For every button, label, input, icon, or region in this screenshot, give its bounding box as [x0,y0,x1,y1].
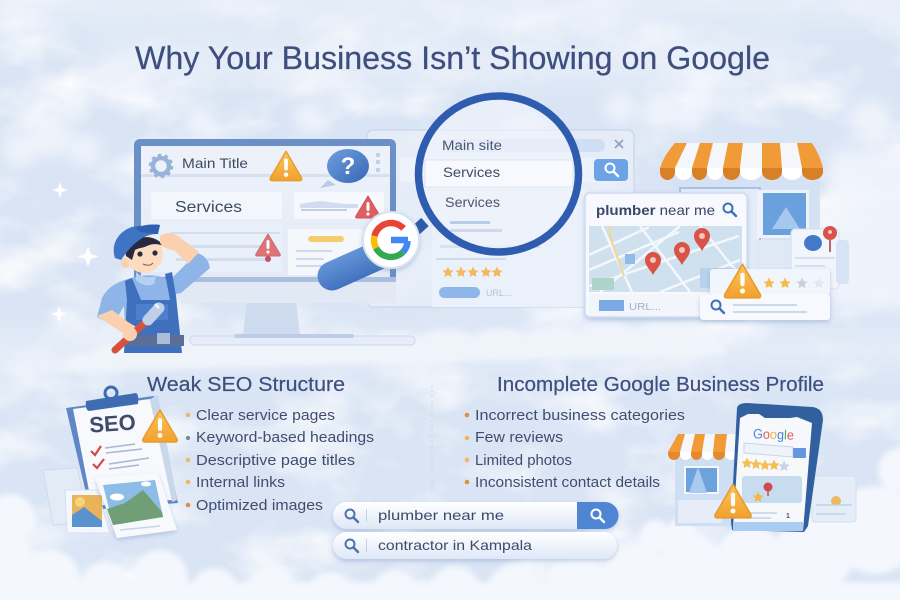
photo yellow mountain [65,490,110,533]
main title text: Main Title [182,155,248,171]
wrench [115,304,159,350]
handle [332,222,425,276]
lens rows: Main site [442,138,502,153]
card behind phone [812,476,856,522]
lens rows [425,138,573,232]
gear icon [150,155,172,177]
toolbar dots [376,153,380,172]
lens rows: Services [443,164,500,180]
shirt and arms [97,253,210,352]
map [589,226,742,292]
storefront [660,143,849,305]
search button [594,159,628,181]
clipboard [66,387,178,510]
bullet list [465,408,685,491]
services row [151,192,282,219]
lens rows: Services [445,195,500,210]
search bar: plumber near me: plumber near me [378,507,504,523]
text lines with warning [150,222,282,272]
url row: URL... [629,302,661,313]
phone and small storefront illustration [668,403,856,532]
warning icon [715,484,751,518]
google wordmark: Google [753,426,794,443]
plumber character [97,224,210,353]
search field [744,443,806,458]
map search card [585,193,747,317]
stars [764,278,824,288]
review card with warning [700,264,830,320]
bullet list: Few reviews [475,430,563,446]
content card with red warning [294,192,384,219]
bullet list: Incorrect business categories [475,408,685,424]
small storefront [668,434,737,526]
stars [742,458,790,471]
phone [731,403,823,532]
bullet list: Keyword-based headings [196,430,374,446]
forearm and hand [97,310,138,338]
shop window [757,190,809,238]
photo green mountain [95,473,177,538]
bottom cloud bank [0,448,900,600]
url label: URL... [486,288,512,298]
SEO clipboard illustration [43,387,178,538]
monitor [134,139,415,345]
monitor stand [190,301,415,345]
warning icon [724,264,761,298]
listing note with pin [791,226,849,289]
striped awning [660,143,823,180]
mini map [742,476,802,503]
phone: 1 [786,513,790,520]
small awning [668,434,737,460]
search bar: plumber near me [333,502,618,529]
bullet list: Descriptive page titles [196,453,355,469]
bullet list: Internal links [196,475,285,491]
question bubble icon: ? [341,153,355,180]
SEO label: SEO [88,409,137,438]
checklist [91,446,104,468]
search bar: contractor in Kampala [333,532,617,559]
background document [43,468,90,525]
magnifying glass [332,96,578,276]
question bubble icon [320,149,369,188]
overalls [124,272,184,353]
bullet list: Clear service pages [196,408,335,424]
heading: Weak SEO Structure [147,374,345,396]
head [114,224,164,273]
bullet list: Optimized images [196,498,323,514]
query text: plumber near me [596,202,715,218]
warning icon [143,410,177,442]
warning icon [270,151,302,181]
left section: weak SEO structure [147,374,374,514]
services row: Services [175,199,242,216]
search bar: contractor in Kampala: contractor in Kampala [378,537,532,553]
url row [589,294,742,316]
star rating row [442,266,502,277]
search icon [724,204,736,216]
right section: incomplete google business profile [465,374,824,491]
bullet list: Inconsistent contact details [475,475,660,491]
bullet list [186,408,374,514]
raised arm [160,233,199,264]
title: Why Your Business Isn’t Showing on Google [135,40,770,76]
google badge [363,212,419,268]
bullet list: Limited photos [475,453,572,469]
close icon [615,140,623,148]
heading: Incomplete Google Business Profile [497,374,824,396]
content card with yellow bar [288,229,373,275]
browser window behind magnifier [367,130,634,307]
mid cloud band [60,321,726,372]
